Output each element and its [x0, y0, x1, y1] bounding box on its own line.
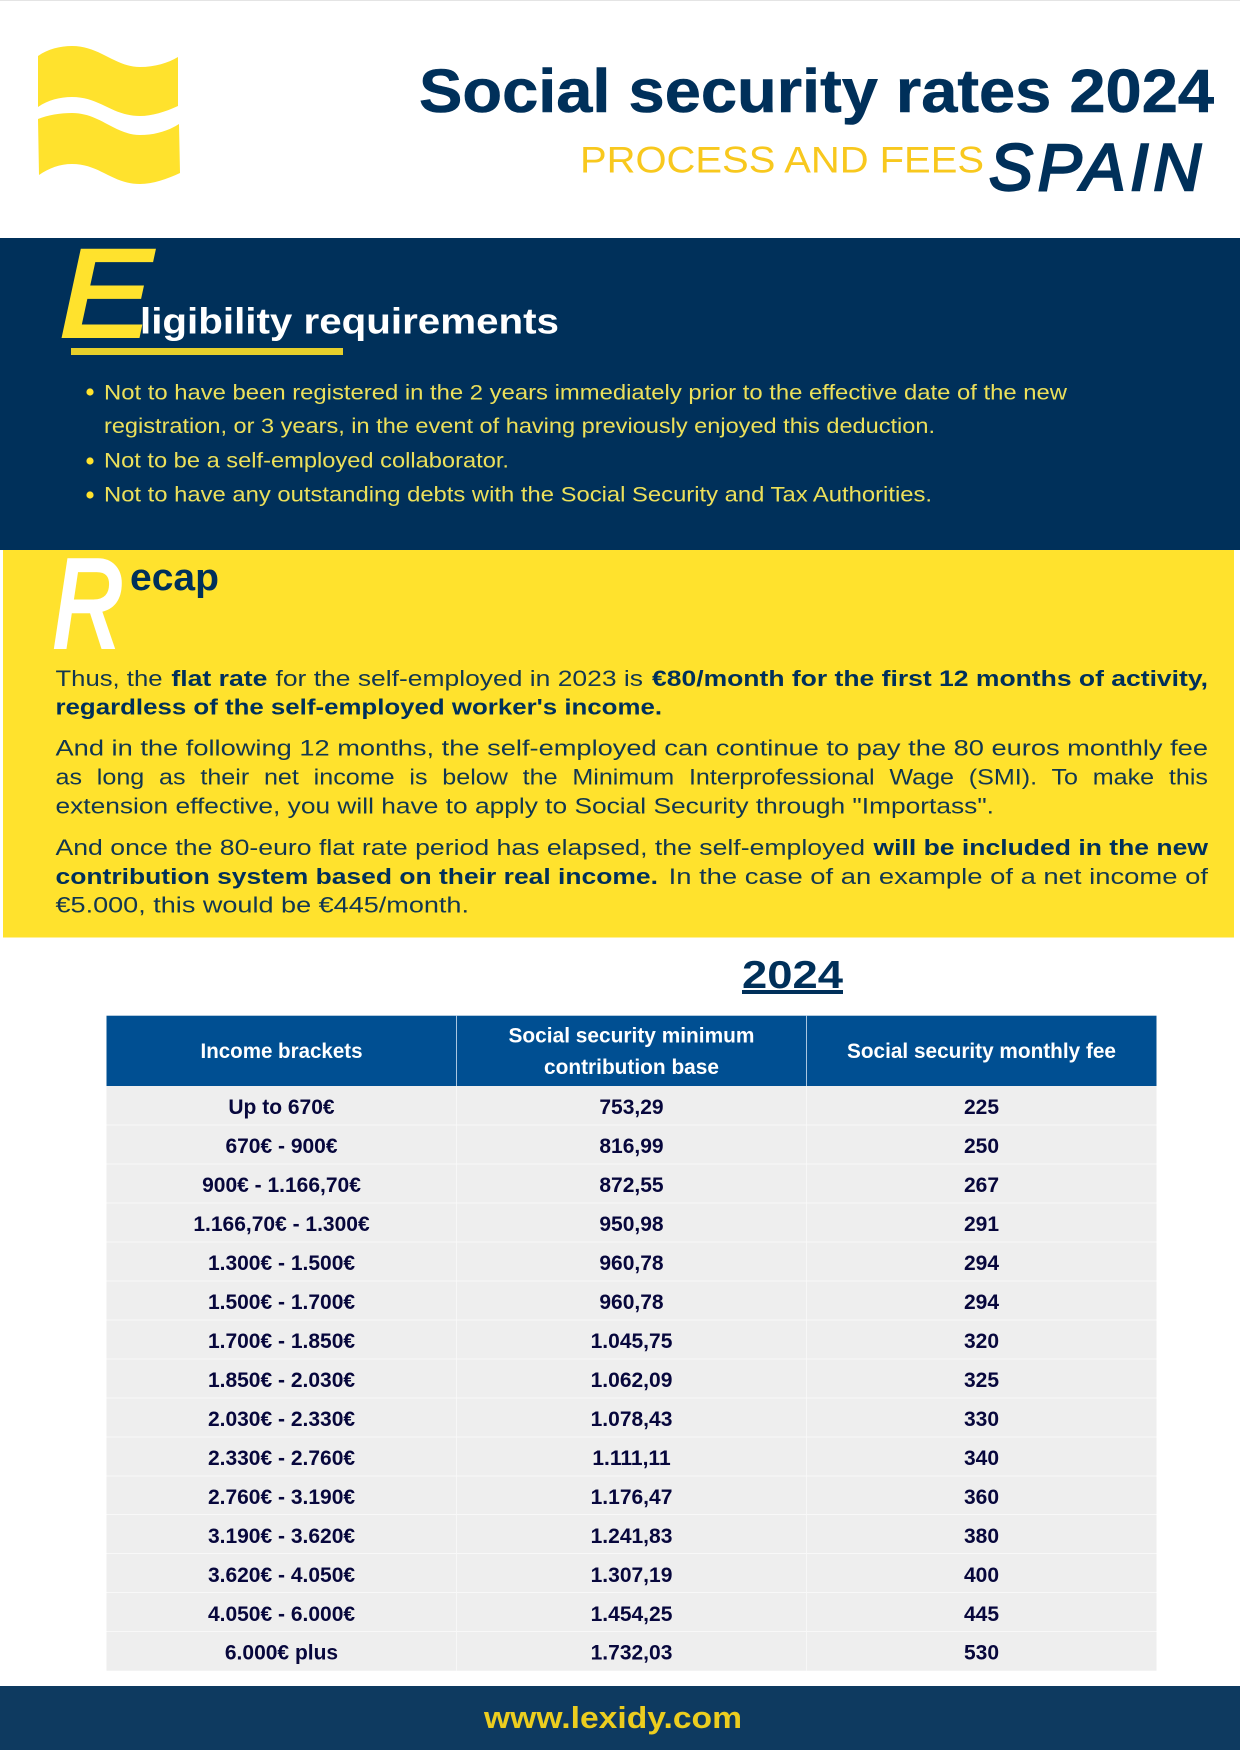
- heading: eligibility requirements: E: [60, 225, 153, 363]
- table body background: [106, 1086, 1156, 1671]
- row: 3190 to 3620: 1.241,83: [591, 1525, 672, 1548]
- row: 1300 to 1500: [208, 1252, 999, 1275]
- subtitle: process and fees: PROCESS AND FEES: [580, 140, 984, 181]
- country label: Spain: SPAIN: [989, 130, 1201, 204]
- paragraph: flat rate: flat rate: [171, 666, 267, 691]
- row: 900 to 1166,70: [202, 1174, 999, 1197]
- row: 1166,70 to 1300: [193, 1213, 999, 1236]
- panel: eligibility requirements: [0, 225, 1240, 550]
- heading: recap: ecap: [130, 557, 219, 599]
- row: 670 to 900: 816,99: [599, 1135, 664, 1158]
- row: 3620 to 4050: 3.620€ - 4.050€: [208, 1564, 355, 1587]
- row: 1850 to 2030: [208, 1369, 999, 1392]
- row: 1300 to 1500: 960,78: [599, 1252, 664, 1275]
- panel: recap: [3, 535, 1234, 938]
- row: 1300 to 1500: 1.300€ - 1.500€: [208, 1252, 355, 1275]
- row: 3620 to 4050: 1.307,19: [591, 1564, 672, 1587]
- row: 1850 to 2030: 1.062,09: [591, 1369, 672, 1392]
- table header row: Social security monthly fee: [847, 1040, 1116, 1063]
- row: 1500 to 1700: 1.500€ - 1.700€: [208, 1291, 355, 1314]
- row: 3190 to 3620: 3.190€ - 3.620€: [208, 1525, 355, 1548]
- header: [38, 46, 1214, 204]
- table header row: contribution base: [544, 1056, 719, 1079]
- row: 1850 to 2030: 325: [964, 1369, 999, 1392]
- paragraph: new contribution system: And once the 80-euro flat rate period has elapsed, the self-employed: [56, 835, 865, 860]
- bullet list: eligibility: [86, 380, 1068, 507]
- row: 6000 plus: 6.000€ plus: [225, 1642, 338, 1664]
- row: 1166,70 to 1300: 291: [964, 1213, 999, 1236]
- row: 1700 to 1850: 320: [964, 1330, 999, 1353]
- paragraph: following 12 months: extension effective, you will have to apply to Social Security through "Importass".: [56, 793, 994, 818]
- row: 4050 to 6000: 445: [964, 1603, 999, 1626]
- bullet list: eligibility: Not to be a self-employed collaborator.: [104, 449, 509, 473]
- row: up to 670: 225: [964, 1096, 999, 1119]
- footer band: [0, 1686, 1240, 1750]
- paragraph: following 12 months: as long as their net income is below the Minimum Interprofessional Wage (SMI). To make this: [56, 764, 1208, 790]
- row: 3190 to 3620: 380: [964, 1525, 999, 1548]
- row: 2760 to 3190: 2.760€ - 3.190€: [208, 1486, 355, 1509]
- row: 1700 to 1850: 1.700€ - 1.850€: [208, 1330, 355, 1353]
- row: 900 to 1166,70: 267: [964, 1174, 999, 1197]
- row: 1700 to 1850: 1.045,75: [591, 1330, 673, 1353]
- paragraph: flat rate: Thus, the: [56, 666, 162, 691]
- row: 2760 to 3190: 360: [964, 1486, 999, 1509]
- row: 2030 to 2330: 1.078,43: [591, 1408, 672, 1431]
- paragraph: flat rate: regardless of the self-employed worker's income.: [56, 694, 662, 719]
- heading: eligibility requirements: [60, 225, 559, 363]
- row: 670 to 900: [225, 1135, 999, 1158]
- paragraph: flat rate: €80/month for the first 12 months of activity,: [652, 666, 1208, 691]
- table: income brackets and fees: [106, 1016, 1156, 1671]
- row: up to 670: 753,29: [599, 1096, 664, 1119]
- row: 2330 to 2760: 1.111,11: [592, 1447, 671, 1470]
- row: 670 to 900: 250: [964, 1135, 999, 1158]
- row: 2760 to 3190: [208, 1486, 999, 1509]
- row: 6000 plus: [225, 1642, 999, 1664]
- paragraph: following 12 months: And in the following 12 months, the self-employed can continue to pay the 80 euros monthly fee: [56, 736, 1208, 761]
- row: 4050 to 6000: 4.050€ - 6.000€: [208, 1603, 355, 1626]
- row: 4050 to 6000: 1.454,25: [591, 1603, 673, 1626]
- icon: yellow wave flag logo: [38, 46, 180, 184]
- row: 2330 to 2760: 2.330€ - 2.760€: [208, 1447, 355, 1470]
- row: 1500 to 1700: 960,78: [599, 1291, 664, 1314]
- table header row: [106, 1016, 1156, 1086]
- row: 1300 to 1500: 294: [964, 1252, 999, 1275]
- table heading: 2024: 2024: [742, 954, 843, 997]
- row: 3620 to 4050: 400: [964, 1564, 999, 1587]
- paragraph: flat rate: for the self-employed in 2023 is: [276, 666, 643, 691]
- paragraph: new contribution system: €5.000, this would be €445/month.: [56, 893, 469, 918]
- bullet list: eligibility: registration, or 3 years, in the event of having previously enjoyed this deduction.: [104, 414, 935, 438]
- title: Social security rates 2024: [419, 57, 1214, 125]
- heading: eligibility requirements: ligibility requirements: [140, 300, 559, 342]
- row: 2760 to 3190: 1.176,47: [591, 1486, 672, 1509]
- bullet list: eligibility: Not to have been registered in the 2 years immediately prior to the effective date of the new: [104, 380, 1068, 404]
- row: 3190 to 3620: [208, 1525, 999, 1548]
- row: 6000 plus: 530: [964, 1642, 999, 1664]
- row: 670 to 900: 670€ - 900€: [225, 1135, 338, 1158]
- footer website link: www.lexidy.com: [483, 1700, 742, 1735]
- row: 1500 to 1700: 294: [964, 1291, 999, 1314]
- row: 1166,70 to 1300: 1.166,70€ - 1.300€: [193, 1213, 370, 1236]
- table header row: Income brackets: [200, 1040, 362, 1063]
- paragraph: following 12 months: [56, 736, 1208, 818]
- row: 2030 to 2330: [208, 1408, 999, 1431]
- heading: recap: R: [53, 535, 123, 674]
- row: 6000 plus: 1.732,03: [591, 1642, 672, 1664]
- row: 2330 to 2760: [208, 1447, 999, 1470]
- paragraph: new contribution system: contribution system based on their real income.: [56, 864, 658, 889]
- row: 1500 to 1700: [208, 1291, 999, 1314]
- row: 2030 to 2330: 330: [964, 1408, 999, 1431]
- row: 2030 to 2330: 2.030€ - 2.330€: [208, 1408, 355, 1431]
- table header row: Social security minimum: [508, 1025, 754, 1048]
- row: 1850 to 2030: 1.850€ - 2.030€: [208, 1369, 355, 1392]
- row: up to 670: [228, 1096, 999, 1119]
- row: 900 to 1166,70: 900€ - 1.166,70€: [202, 1174, 361, 1197]
- bullet list: eligibility: Not to have any outstanding debts with the Social Security and Tax Authorities.: [104, 483, 932, 507]
- paragraph: new contribution system: [56, 835, 1209, 918]
- row: 1166,70 to 1300: 950,98: [599, 1213, 664, 1236]
- row: 4050 to 6000: [208, 1603, 999, 1626]
- row: 3620 to 4050: [208, 1564, 999, 1587]
- paragraph: new contribution system: In the case of an example of a net income of: [669, 864, 1209, 889]
- row: 2330 to 2760: 340: [964, 1447, 999, 1470]
- row: up to 670: Up to 670€: [228, 1096, 335, 1119]
- paragraph: flat rate: [56, 666, 1208, 719]
- row: 900 to 1166,70: 872,55: [599, 1174, 664, 1197]
- heading: recap: [53, 535, 219, 674]
- paragraph: new contribution system: will be included in the new: [872, 835, 1209, 860]
- row: 1700 to 1850: [208, 1330, 999, 1353]
